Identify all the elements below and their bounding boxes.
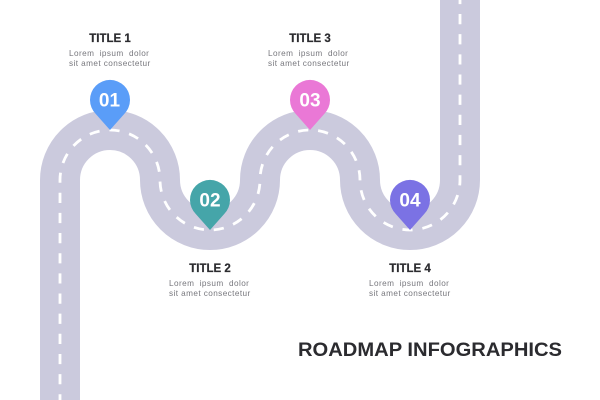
step 4: title and description: Lorem ipsum dolor (369, 279, 449, 288)
step 2: title and description: sit amet consectetur (169, 289, 251, 298)
step 4: purple pin 04 (390, 180, 430, 230)
step 2: title and description: Lorem ipsum dolor (169, 279, 249, 288)
step 4: title and description (369, 263, 451, 298)
step 3: title and description (268, 33, 350, 68)
step 4: title and description: TITLE 4 (389, 263, 431, 275)
step 2: title and description: TITLE 2 (189, 263, 231, 275)
step 1: title and description (69, 33, 151, 68)
step 4: purple pin 04: 04 (399, 190, 421, 212)
step 3: pink pin 03 (290, 80, 330, 130)
step 3: title and description: sit amet consectetur (268, 59, 350, 68)
step 3: pink pin 03: 03 (299, 90, 321, 112)
step 1: title and description: TITLE 1 (89, 33, 131, 45)
step 1: blue pin 01: 01 (99, 90, 120, 112)
step 2: title and description (169, 263, 251, 298)
step 1: blue pin 01 (90, 80, 130, 130)
step 1: title and description: sit amet consectetur (69, 59, 151, 68)
step 3: title and description: Lorem ipsum dolor (268, 49, 348, 58)
step 1: title and description: Lorem ipsum dolor (69, 49, 149, 58)
step 3: title and description: TITLE 3 (289, 33, 331, 45)
main title: ROADMAP INFOGRAPHICS (298, 339, 562, 361)
step 4: title and description: sit amet consectetur (369, 289, 451, 298)
step 2: teal pin 02 (190, 180, 230, 230)
winding road (60, 0, 460, 400)
step 2: teal pin 02: 02 (199, 190, 221, 212)
